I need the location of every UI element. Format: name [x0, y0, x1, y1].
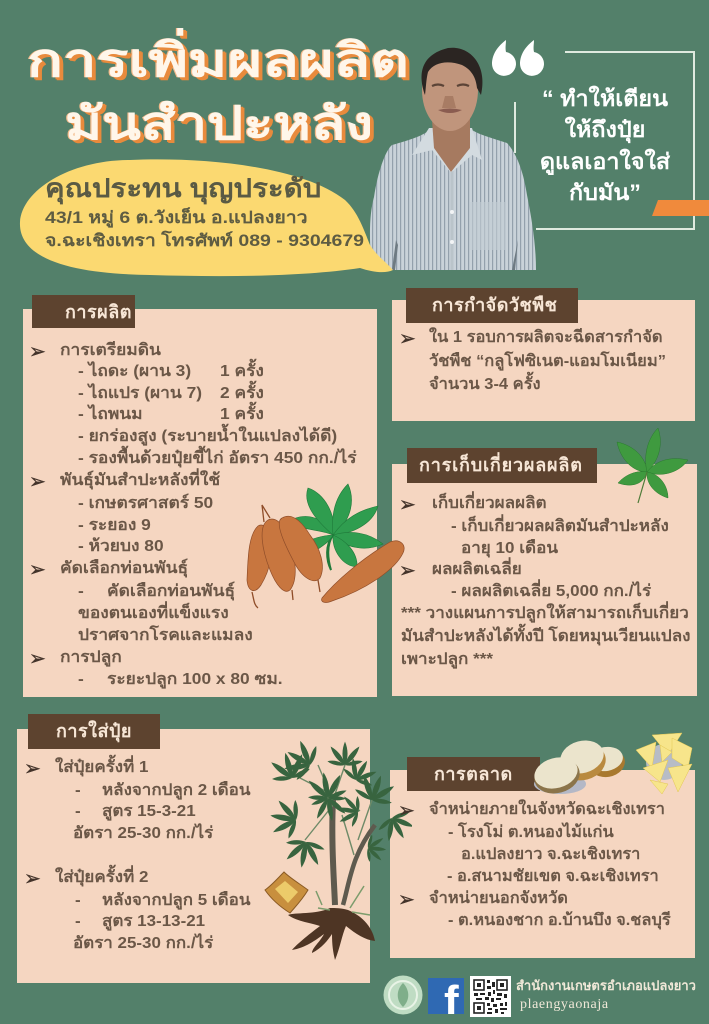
heading: harvest: การเก็บเกี่ยวผลผลิต — [419, 455, 583, 475]
heading: harvest — [407, 448, 597, 483]
production text — [29, 339, 357, 689]
production text: ➢ — [29, 339, 46, 363]
production text: การปลูก — [60, 649, 122, 666]
icon: bullet arrow over plant: ➢ — [398, 798, 415, 822]
production text: - รองพื้นด้วยปุ๋ยขี้ไก่ อัตรา 450 กก./ไร่ — [78, 450, 357, 467]
heading: production: การผลิต — [65, 302, 132, 322]
fertilizer text: หลังจากปลูก 2 เดือน — [102, 782, 250, 799]
production text: ➢ — [29, 557, 46, 581]
production text: - ระยอง 9 — [78, 517, 151, 534]
footer: QR code — [470, 976, 511, 1017]
production text: 1 ครั้ง — [220, 363, 264, 380]
farmer quote — [540, 86, 670, 205]
marketing text: ➢ — [398, 887, 415, 911]
weed control text: ➢ — [399, 326, 416, 350]
footer: agency name and page — [516, 978, 696, 1012]
marketing text: จำหน่ายนอกจังหวัด — [429, 890, 568, 907]
footer: agency name and page: สำนักงานเกษตรอำเภอแปลงยาว — [516, 978, 696, 993]
panel: marketing — [390, 770, 695, 958]
footer: facebook icon — [428, 978, 464, 1014]
heading: weed control: การกำจัดวัชพืช — [432, 295, 557, 315]
production text: คัดเลือกท่อนพันธุ์ — [107, 583, 235, 600]
production text: - ห้วยบง 80 — [78, 538, 164, 555]
footer: agency logo — [384, 976, 422, 1014]
heading: fertilizer — [28, 714, 160, 749]
speech bubble: farmer name and address: 43/1 หมู่ 6 ต.วังเย็น อ.แปลงยาว — [45, 209, 308, 227]
production text: การเตรียมดิน — [60, 342, 161, 359]
weed control text: จำนวน 3-4 ครั้ง — [429, 376, 541, 393]
production text: ปราศจากโรคและแมลง — [78, 627, 253, 644]
heading: weed control — [406, 288, 578, 323]
panel: harvest — [392, 464, 697, 696]
weed control text: ใน 1 รอบการผลิตจะฉีดสารกำจัด — [429, 329, 663, 346]
fertilizer text: สูตร 13-13-21 — [102, 913, 205, 930]
title: มันสำปะหลัง — [65, 97, 373, 149]
farmer quote: ดูแลเอาใจใส่ — [540, 149, 670, 174]
fertilizer text: ➢ — [24, 756, 41, 780]
production text: - ไถดะ (ผาน 3) — [78, 363, 191, 380]
production text: - ไถแปร (ผาน 7) — [78, 385, 202, 402]
marketing text: - โรงโม่ ต.หนองไม้แก่น — [448, 824, 614, 841]
fertilizer text: สูตร 15-3-21 — [102, 803, 196, 820]
weed control text — [399, 326, 666, 393]
farmer quote: “ ทำให้เตียน — [542, 86, 668, 111]
production text: - — [78, 583, 84, 600]
illustration: cassava plant with roots — [270, 741, 412, 960]
marketing text — [398, 799, 671, 930]
heading: marketing — [407, 757, 540, 791]
heading: fertilizer: การใส่ปุ๋ย — [56, 721, 132, 741]
decorative quote marks — [492, 40, 544, 76]
harvest text: อายุ 10 เดือน — [461, 540, 558, 557]
fertilizer text: หลังจากปลูก 5 เดือน — [102, 892, 250, 909]
production text: - — [78, 671, 84, 688]
heading: marketing: การตลาด — [434, 764, 513, 784]
panel: production — [23, 309, 377, 697]
heading: production — [32, 295, 135, 328]
harvest text: *** วางแผนการปลูกให้สามารถเก็บเกี่ยว — [401, 605, 689, 622]
harvest text: - ผลผลิตเฉลี่ย 5,000 กก./ไร่ — [451, 583, 651, 600]
fertilizer text: - — [75, 892, 81, 909]
harvest text — [399, 491, 690, 669]
farmer quote: กับมัน” — [569, 180, 641, 205]
portrait of farmer — [370, 48, 536, 270]
weed control text: วัชพืช “กลูโฟซิเนต-แอมโมเนียม” — [429, 353, 666, 370]
marketing text: - ต.หนองชาก อ.บ้านบึง จ.ชลบุรี — [448, 912, 671, 929]
production text: ของตนเองที่แข็งแรง — [78, 605, 229, 622]
harvest text: ผลผลิตเฉลี่ย — [432, 561, 522, 578]
production text: - ไถพนม — [78, 406, 143, 423]
production text: - ยกร่องสูง (ระบายน้ำในแปลงได้ดี) — [78, 428, 337, 445]
fertilizer text: อัตรา 25-30 กก./ไร่ — [73, 935, 213, 952]
quote frame — [514, 51, 709, 230]
production text: คัดเลือกท่อนพันธุ์ — [60, 560, 188, 577]
production text: ระยะปลูก 100 x 80 ซม. — [107, 671, 283, 688]
production text: พันธุ์มันสำปะหลังที่ใช้ — [60, 472, 220, 489]
farmer quote: ให้ถึงปุ๋ย — [565, 117, 645, 142]
fertilizer text — [24, 754, 250, 952]
fertilizer text: ใส่ปุ๋ยครั้งที่ 2 — [55, 869, 148, 886]
speech bubble: farmer name and address: คุณประทน บุญประดับ — [45, 173, 321, 203]
panel: weed control — [392, 300, 695, 421]
fertilizer text: ➢ — [24, 866, 41, 890]
fertilizer text: อัตรา 25-30 กก./ไร่ — [73, 825, 213, 842]
marketing text: - อ.สนามชัยเขต จ.ฉะเชิงเทรา — [447, 868, 659, 885]
speech bubble: farmer name and address — [20, 159, 393, 276]
production text: ➢ — [29, 469, 46, 493]
marketing text: จำหน่ายภายในจังหวัดฉะเชิงเทรา — [429, 801, 665, 818]
illustration: fertilizer bag — [264, 871, 309, 914]
title: การเพิ่มผลผลิต — [27, 34, 409, 86]
illustration: cassava roots and leaf — [246, 484, 404, 608]
production text: ➢ — [29, 646, 46, 670]
harvest text: มันสำปะหลังได้ทั้งปี โดยหมุนเวียนแปลง — [401, 628, 690, 645]
harvest text: ➢ — [399, 492, 416, 516]
harvest text: - เก็บเกี่ยวผลผลิตมันสำปะหลัง — [451, 518, 669, 535]
illustration: cassava leaf — [616, 428, 688, 504]
production text: - เกษตรศาสตร์ 50 — [78, 495, 213, 512]
harvest text: เพาะปลูก *** — [401, 651, 493, 668]
speech bubble: farmer name and address: จ.ฉะเชิงเทรา โทรศัพท์ 089 - 9304679 — [45, 232, 364, 250]
harvest text: เก็บเกี่ยวผลผลิต — [432, 495, 547, 512]
production text: 1 ครั้ง — [220, 406, 264, 423]
harvest text: ➢ — [399, 558, 416, 582]
fertilizer text: - — [75, 913, 81, 930]
footer: agency name and page: plaengyaonaja — [520, 997, 609, 1012]
fertilizer text: ใส่ปุ๋ยครั้งที่ 1 — [55, 759, 148, 776]
illustration: cassava slices — [534, 740, 625, 794]
fertilizer text: - — [75, 782, 81, 799]
fertilizer text: - — [75, 803, 81, 820]
title — [27, 28, 410, 149]
illustration: cassava chips — [636, 732, 692, 794]
production text: 2 ครั้ง — [220, 385, 264, 402]
marketing text: อ.แปลงยาว จ.ฉะเชิงเทรา — [461, 846, 640, 863]
panel: fertilizer — [17, 729, 370, 983]
